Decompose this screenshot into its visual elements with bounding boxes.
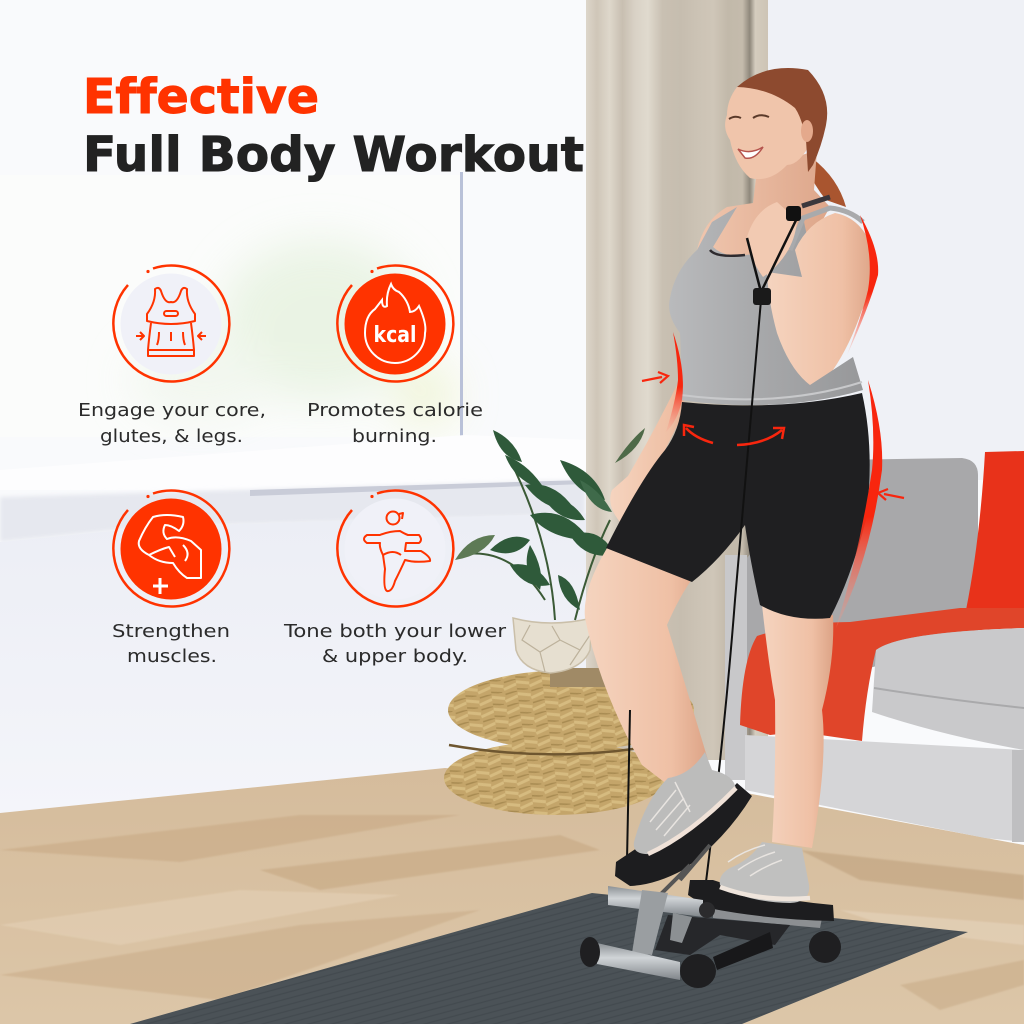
- left pedal: [615, 783, 752, 886]
- caption: tone: & upper body.: [322, 646, 468, 667]
- sofa: [725, 451, 1024, 842]
- title: [83, 69, 584, 183]
- back wheel: [809, 931, 841, 963]
- curve: shoulder: [847, 215, 878, 355]
- caption: strengthen: Strengthen: [112, 621, 230, 642]
- hair: [737, 68, 827, 172]
- face features: [729, 115, 769, 158]
- curve: glutes: [836, 380, 882, 628]
- top tube: [608, 886, 703, 917]
- caption: tone: Tone both your lower: [283, 621, 507, 642]
- sofa base: [745, 735, 1024, 842]
- back leg: [762, 605, 833, 848]
- left arm: [610, 345, 695, 522]
- caption: strengthen: muscles.: [127, 646, 217, 667]
- blanket throw: [740, 608, 1024, 741]
- arrow: hip right: [737, 428, 784, 445]
- support struts: [650, 845, 710, 905]
- right shoe: [720, 842, 810, 903]
- frame post: [632, 890, 668, 955]
- front wheels: [580, 937, 600, 967]
- arrow: glutes in: [878, 489, 904, 500]
- top strap over shoulder: [790, 208, 863, 250]
- neck and chest skin: [697, 150, 830, 262]
- stems and leaves: [455, 428, 645, 620]
- front leg: [585, 548, 708, 785]
- curve: abdomen: [666, 332, 683, 432]
- raised arm: [767, 213, 875, 385]
- title: Full Body Workout: [83, 127, 584, 183]
- red blanket top: [966, 451, 1024, 612]
- ponytail: [808, 158, 846, 207]
- arrow: abdomen in: [642, 372, 668, 383]
- fist: [747, 202, 797, 277]
- woman: [585, 68, 875, 890]
- icon: kcal flame: [337, 266, 453, 382]
- icon: toning figure: [337, 491, 453, 607]
- plant: [455, 428, 645, 673]
- black bar: [713, 932, 773, 970]
- caption: core: glutes, & legs.: [100, 426, 243, 447]
- shorts: [606, 393, 870, 619]
- mini stepper: [580, 783, 841, 988]
- pot: [513, 618, 592, 673]
- woven poufs: [444, 670, 694, 815]
- lower wall: [0, 513, 590, 813]
- right wall: [768, 0, 1024, 480]
- caption: core: Engage your core,: [78, 400, 266, 421]
- sofa back: [745, 458, 978, 700]
- red motion curves and arrows: [642, 215, 904, 628]
- window with blurred garden: [0, 172, 463, 437]
- caption: calorie: burning.: [352, 426, 437, 447]
- window sill: [0, 435, 590, 542]
- head: [725, 85, 812, 179]
- tank top: [669, 207, 863, 405]
- stepper mat: [130, 893, 968, 1024]
- icon: muscle: [113, 491, 229, 607]
- left shoe: [634, 752, 736, 854]
- right pedal: [688, 880, 834, 921]
- front tube: [597, 943, 680, 980]
- icon: kcal flame: kcal: [374, 323, 416, 348]
- title: Effective: [83, 69, 319, 125]
- ear: [801, 120, 813, 142]
- shoes: [634, 752, 810, 903]
- floor: [0, 768, 1024, 1024]
- seat cushion: [872, 628, 1024, 750]
- frame interior: [655, 915, 790, 955]
- right pedal support bar: [713, 905, 822, 928]
- curtain: [586, 0, 768, 760]
- book: [550, 668, 620, 687]
- caption: calorie: Promotes calorie: [307, 400, 483, 421]
- arrow: hip left: [684, 425, 713, 443]
- icon: core top: [113, 266, 229, 382]
- resistance band: [627, 206, 801, 890]
